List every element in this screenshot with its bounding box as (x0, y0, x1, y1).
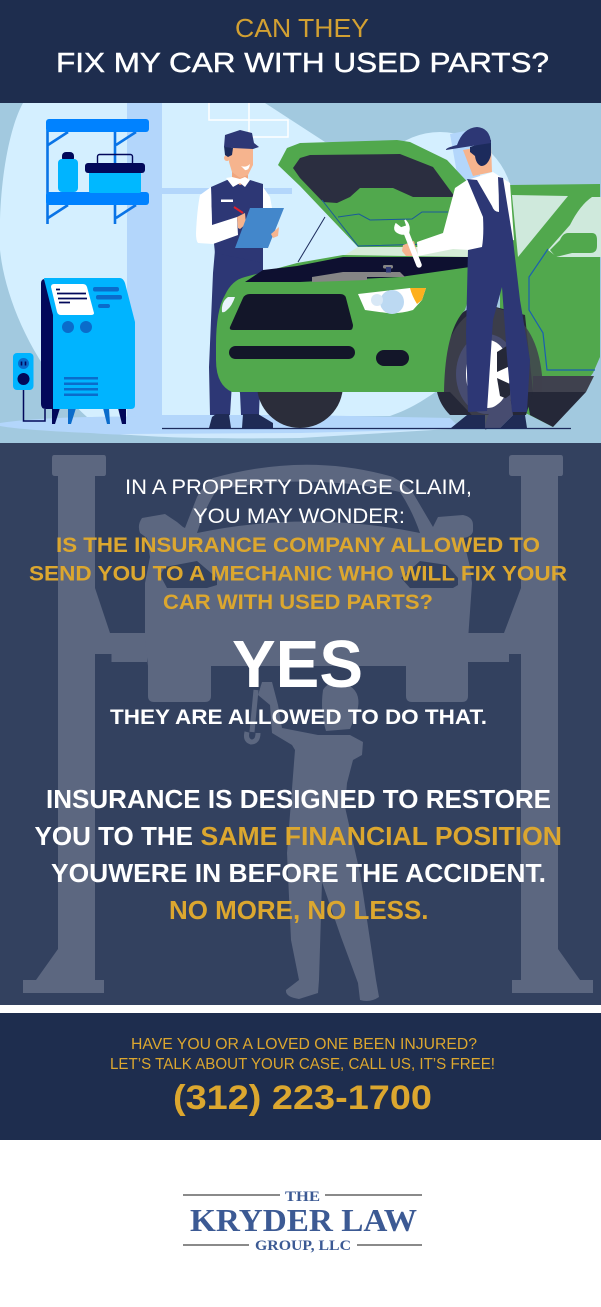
background silhouette: lift, car and mechanic (23, 455, 593, 1001)
hood (278, 140, 475, 247)
text: insurance statement: SAME FINANCIAL POSITION (200, 823, 562, 851)
icon: diagnostic machine (41, 278, 135, 424)
answer: yes: YES (232, 627, 363, 702)
logo: The Kryder Law Group: KRYDER LAW (190, 1202, 417, 1238)
raised car (139, 465, 473, 702)
text: property damage question: YOU MAY WONDER: (193, 505, 405, 528)
text: property damage question: IN A PROPERTY DAMAGE CLAIM, (125, 476, 472, 499)
logo: The Kryder Law Group: GROUP, LLC (255, 1238, 351, 1254)
call to action text: HAVE YOU OR A LOVED ONE BEEN INJURED? (131, 1036, 477, 1053)
panel: call to action: LET’S TALK ABOUT YOUR CASE, CALL US, IT’S FREE! (110, 1056, 495, 1073)
panel: question and answer (0, 443, 601, 1005)
illustration: mechanic with clipboard (196, 130, 284, 428)
ground line (162, 428, 571, 430)
phone number: (312) 223-1700 (173, 1079, 432, 1117)
text: property damage question: CAR WITH USED PARTS? (163, 591, 433, 614)
text: property damage question (29, 476, 567, 614)
text: property damage question: SEND YOU TO A MECHANIC WHO WILL FIX YOUR (29, 562, 567, 586)
text: insurance statement: YOU TO THE (34, 823, 193, 851)
answer detail: THEY ARE ALLOWED TO DO THAT. (110, 706, 487, 729)
mechanic (322, 683, 358, 731)
text: insurance statement (34, 786, 562, 925)
rear wheel (437, 304, 533, 415)
illustration: mechanic with wrench (395, 127, 530, 428)
car lift left (23, 455, 147, 993)
car lift right (468, 455, 593, 993)
headlight (358, 288, 426, 313)
logo: The Kryder Law Group (183, 1189, 422, 1254)
car door and rear body (500, 184, 600, 427)
text: property damage question: IS THE INSURANCE COMPANY ALLOWED TO (56, 534, 540, 557)
text: insurance statement: NO MORE, NO LESS. (169, 897, 428, 925)
title line 1: CAN THEY (235, 13, 369, 43)
logo: The Kryder Law Group: THE (285, 1189, 320, 1205)
front body (216, 255, 480, 392)
panel: call to action (0, 1013, 601, 1140)
text: insurance statement: YOUWERE IN BEFORE THE ACCIDENT. (51, 860, 546, 888)
title line 2: FIX MY CAR WITH USED PARTS? (56, 47, 549, 78)
panel: header (0, 0, 601, 103)
panel: mechanics illustration (0, 103, 601, 443)
text: insurance statement: INSURANCE IS DESIGNED TO RESTORE (46, 786, 551, 814)
illustration: green car (216, 140, 601, 430)
icon: wrench (395, 220, 419, 265)
icon: wall shelf (46, 119, 149, 224)
icon: wall outlet and cable (13, 353, 45, 421)
